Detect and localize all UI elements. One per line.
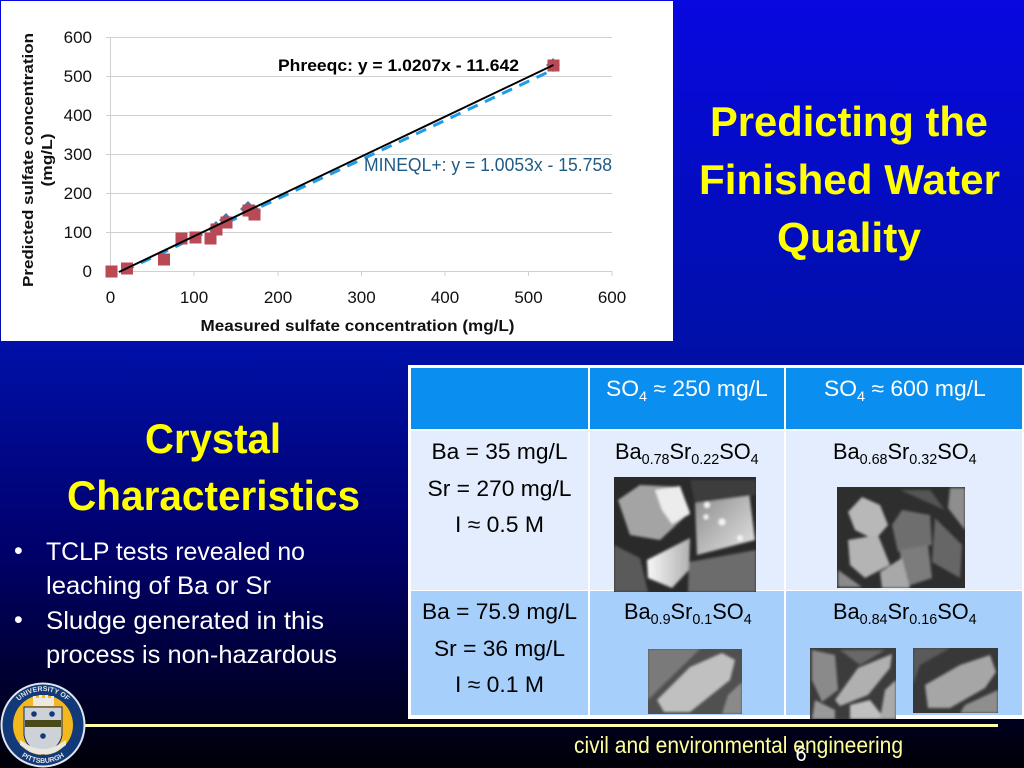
row 2 conditions: Ba = 75.9 mg/L <box>422 599 577 624</box>
row 1 conditions: I ≈ 0.5 M <box>455 512 544 537</box>
y axis tick labels: 0 <box>83 262 92 281</box>
crystal formulas: 0.32 <box>909 452 937 468</box>
ribbon <box>20 740 66 754</box>
crystal formulas: 4 <box>969 612 977 628</box>
crystal formulas <box>615 439 977 628</box>
title: predicting the finished water quality: Predicting the <box>710 98 988 145</box>
row 2 conditions <box>422 599 577 697</box>
y axis tick labels: 600 <box>64 28 92 47</box>
logo: university of pittsburgh seal <box>0 682 86 768</box>
y axis tick labels <box>64 28 92 281</box>
crystal formulas: Sr <box>671 599 692 624</box>
table row 1 background <box>411 431 1022 590</box>
header labels: ≈ 250 mg/L <box>647 376 768 401</box>
seal lettering: UNIVERSITY OF <box>16 686 70 700</box>
header labels: 4 <box>857 389 865 405</box>
y axis title: Predicted sulfate concentration <box>20 33 37 287</box>
crystal photo: Ba0.84 right <box>913 648 998 713</box>
slide number: 6 <box>795 744 807 766</box>
row 1 conditions <box>428 439 572 537</box>
x axis tick labels: 400 <box>431 288 459 307</box>
y axis tick labels: 400 <box>64 106 92 125</box>
header labels: SO <box>606 376 639 401</box>
row 2 conditions: Sr = 36 mg/L <box>434 636 565 661</box>
crystal formulas: 0.22 <box>691 452 719 468</box>
crystal formulas: Sr <box>670 439 691 464</box>
row 1 conditions: Sr = 270 mg/L <box>428 476 572 501</box>
heading: crystal characteristics <box>67 415 360 519</box>
row 1 conditions: Ba = 35 mg/L <box>432 439 568 464</box>
x axis tick labels: 600 <box>598 288 626 307</box>
header labels: SO <box>824 376 857 401</box>
MINEQL+ data points <box>106 58 560 276</box>
crystal formulas: 4 <box>969 452 977 468</box>
bullet list: • <box>14 606 23 634</box>
crystal formulas: 0.16 <box>909 612 937 628</box>
x axis tick labels: 300 <box>347 288 376 307</box>
crystal formulas: Ba <box>833 599 860 624</box>
bullet list: TCLP tests revealed no <box>46 538 305 566</box>
y axis title: (mg/L) <box>39 134 56 186</box>
y axis title <box>20 33 56 287</box>
crystal formulas: Ba <box>624 599 651 624</box>
bullet list <box>14 537 337 669</box>
crystal formulas: SO <box>719 439 751 464</box>
crystal formulas: 4 <box>744 612 752 628</box>
MINEQL+ trend line <box>124 70 553 271</box>
x axis tick labels: 0 <box>106 288 115 307</box>
y axis tick labels: 500 <box>64 67 92 86</box>
crystal formulas: 4 <box>751 452 759 468</box>
crystal formulas: 0.78 <box>642 452 670 468</box>
crystal formulas: Ba <box>615 439 642 464</box>
bullet list: leaching of Ba or Sr <box>46 572 271 600</box>
crystal photo: Ba0.84 left <box>810 648 896 719</box>
crystal formulas: Ba <box>833 439 860 464</box>
crystal formulas: SO <box>712 599 744 624</box>
crystal photo: Ba0.78 <box>614 477 756 592</box>
crystal formulas: 0.84 <box>860 612 888 628</box>
crystal photo: Ba0.9 <box>648 649 742 714</box>
table header row <box>411 368 1022 429</box>
x axis tick labels: 500 <box>514 288 543 307</box>
footer department text: civil and environmental engineering <box>574 732 903 758</box>
footer rule <box>85 724 998 727</box>
panel: scatter chart <box>1 1 673 341</box>
header labels <box>606 376 986 405</box>
logo: university of pittsburgh seal: PITTSBURGH <box>22 752 64 763</box>
header labels: ≈ 600 mg/L <box>865 376 986 401</box>
crystal formulas: SO <box>937 599 969 624</box>
crystal photo: Ba0.68 <box>837 487 965 588</box>
crystal formulas: 0.68 <box>860 452 888 468</box>
castle <box>33 695 54 706</box>
title: predicting the finished water quality: Finished Water <box>699 156 1000 203</box>
MINEQL+ equation: MINEQL+: y = 1.0053x - 15.758 <box>364 155 612 175</box>
Phreeqc equation: Phreeqc: y = 1.0207x - 11.642 <box>278 56 519 75</box>
Phreeqc trend line <box>119 65 554 272</box>
crystal formulas: 0.9 <box>651 612 671 628</box>
row 2 conditions: I ≈ 0.1 M <box>455 672 544 697</box>
x axis title: Measured sulfate concentration (mg/L) <box>200 318 514 335</box>
title: predicting the finished water quality: Quality <box>777 214 922 261</box>
bullet list: process is non-hazardous <box>46 641 337 669</box>
chart gridlines <box>106 37 612 276</box>
heading: crystal characteristics: Crystal <box>145 415 281 462</box>
y axis tick labels: 100 <box>64 223 92 242</box>
table row 2 background <box>411 591 1022 715</box>
shield <box>24 707 62 755</box>
x axis tick labels: 200 <box>264 288 292 307</box>
y axis tick labels: 200 <box>64 184 92 203</box>
crystal formulas: 0.1 <box>692 612 712 628</box>
panel: crystal table <box>408 365 1024 719</box>
crystal formulas: Sr <box>888 439 909 464</box>
bullet list: • <box>14 537 23 565</box>
Phreeqc data points <box>106 60 560 278</box>
y axis tick labels: 300 <box>64 145 92 164</box>
heading: crystal characteristics: Characteristics <box>67 472 360 519</box>
x axis tick labels <box>106 288 626 307</box>
bullet list: Sludge generated in this <box>46 607 324 635</box>
crystal formulas: SO <box>937 439 969 464</box>
x axis tick labels: 100 <box>180 288 208 307</box>
header labels: 4 <box>639 389 647 405</box>
title: predicting the finished water quality <box>699 98 1000 261</box>
crystal formulas: Sr <box>888 599 909 624</box>
